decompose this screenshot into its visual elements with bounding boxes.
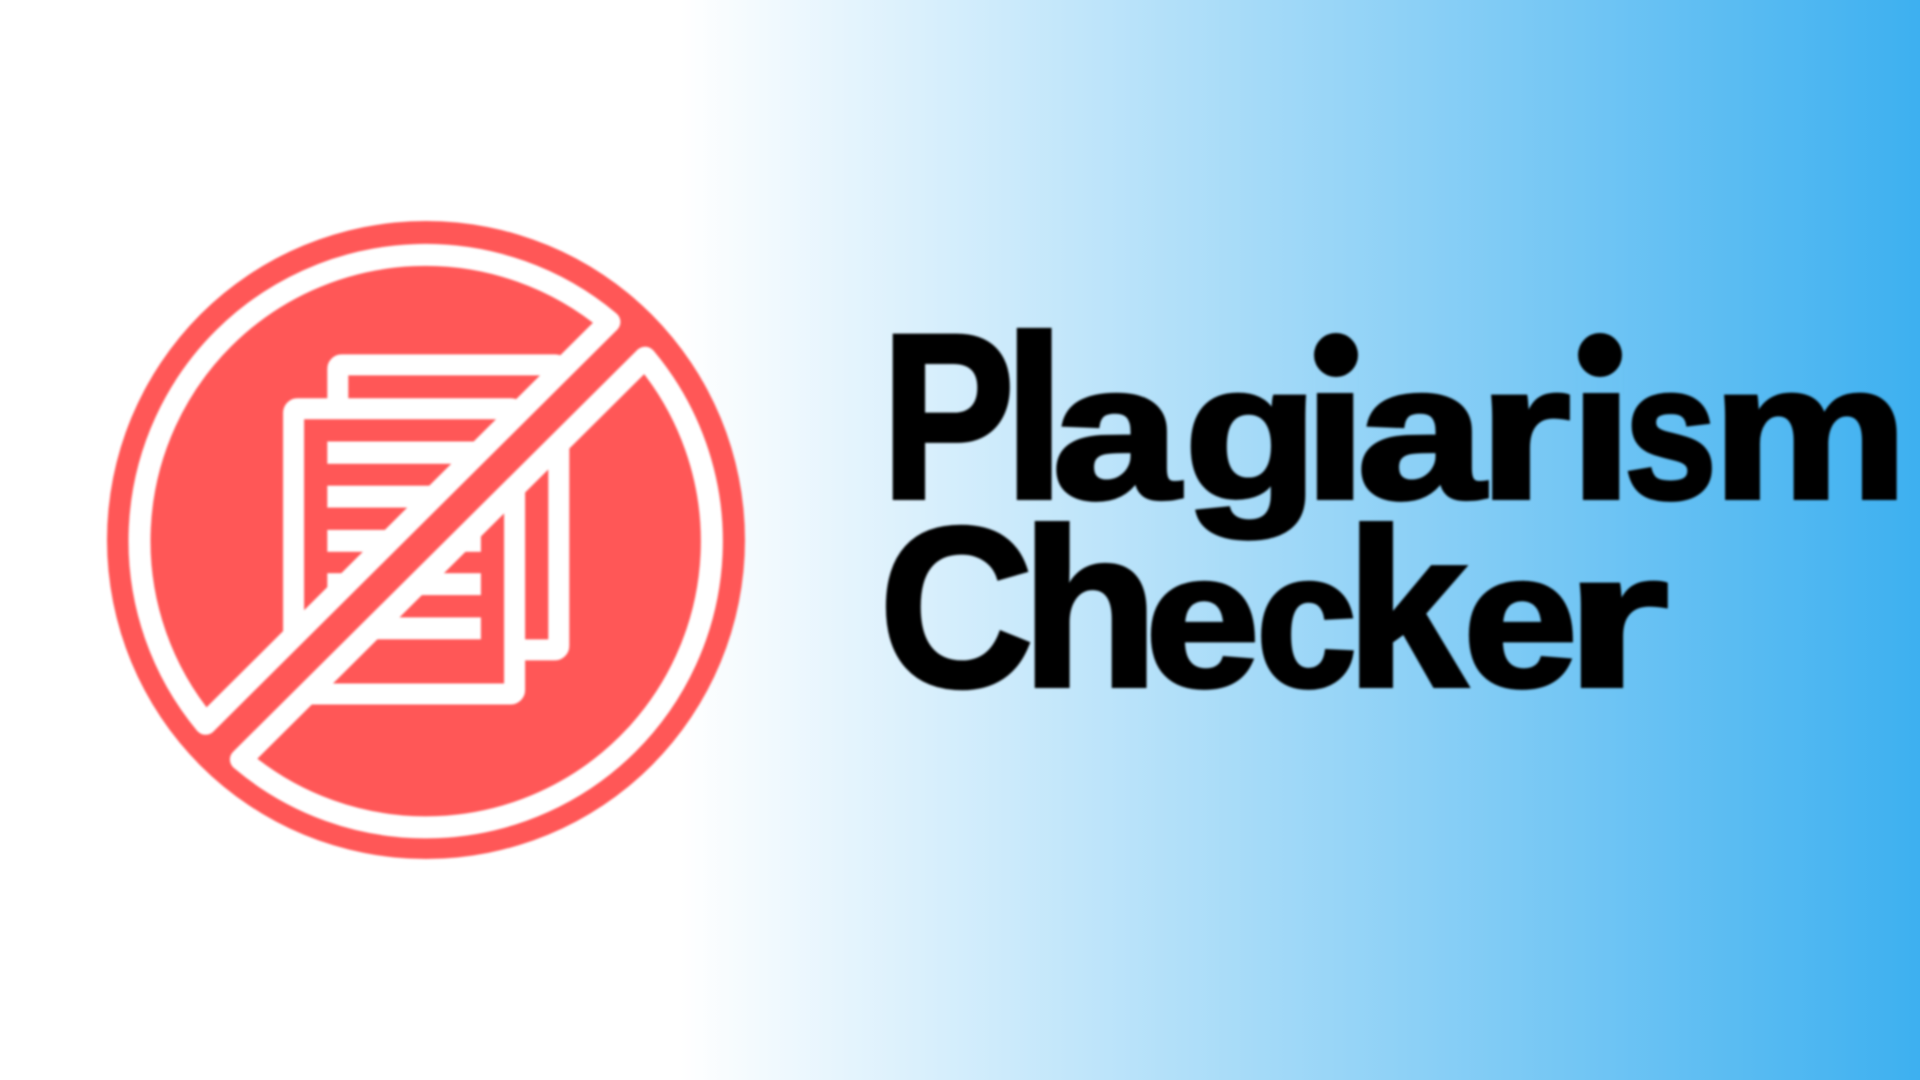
- background patches separating i dots from stems: [1313, 366, 1622, 393]
- title: Checker: h: [1021, 482, 1158, 734]
- title: Plagiarism: r: [1478, 324, 1571, 539]
- title: Plagiarism: i: [1303, 313, 1367, 542]
- upper-left ring segment: [140, 255, 609, 724]
- diagonal red band: [206, 322, 645, 760]
- title: Plagiarism: l: [1003, 289, 1066, 548]
- icon: stacked documents: [294, 365, 559, 694]
- title: Checker: e: [1145, 512, 1260, 727]
- lower-right ring segment: [241, 358, 712, 827]
- title: Checker: k: [1346, 482, 1468, 734]
- title: Plagiarism: g: [1184, 324, 1318, 539]
- title: Plagiarism: s: [1624, 324, 1717, 539]
- red disc: [107, 221, 745, 859]
- title: Checker: c: [1256, 512, 1357, 727]
- title: Plagiarism: m: [1712, 324, 1908, 539]
- front document: [294, 409, 515, 694]
- title: Checker: e: [1463, 512, 1578, 727]
- back document: [338, 365, 559, 650]
- title: Plagiarism: a: [1357, 324, 1486, 539]
- round dots on the letters i: [1314, 333, 1622, 377]
- title: Checker: C: [879, 481, 1034, 735]
- title: Plagiarism: P: [881, 285, 1015, 549]
- title: Checker: r: [1565, 512, 1669, 727]
- title: Plagiarism: a: [1052, 324, 1181, 539]
- document text lines: [327, 442, 481, 639]
- title: Plagiarism: i: [1569, 313, 1633, 542]
